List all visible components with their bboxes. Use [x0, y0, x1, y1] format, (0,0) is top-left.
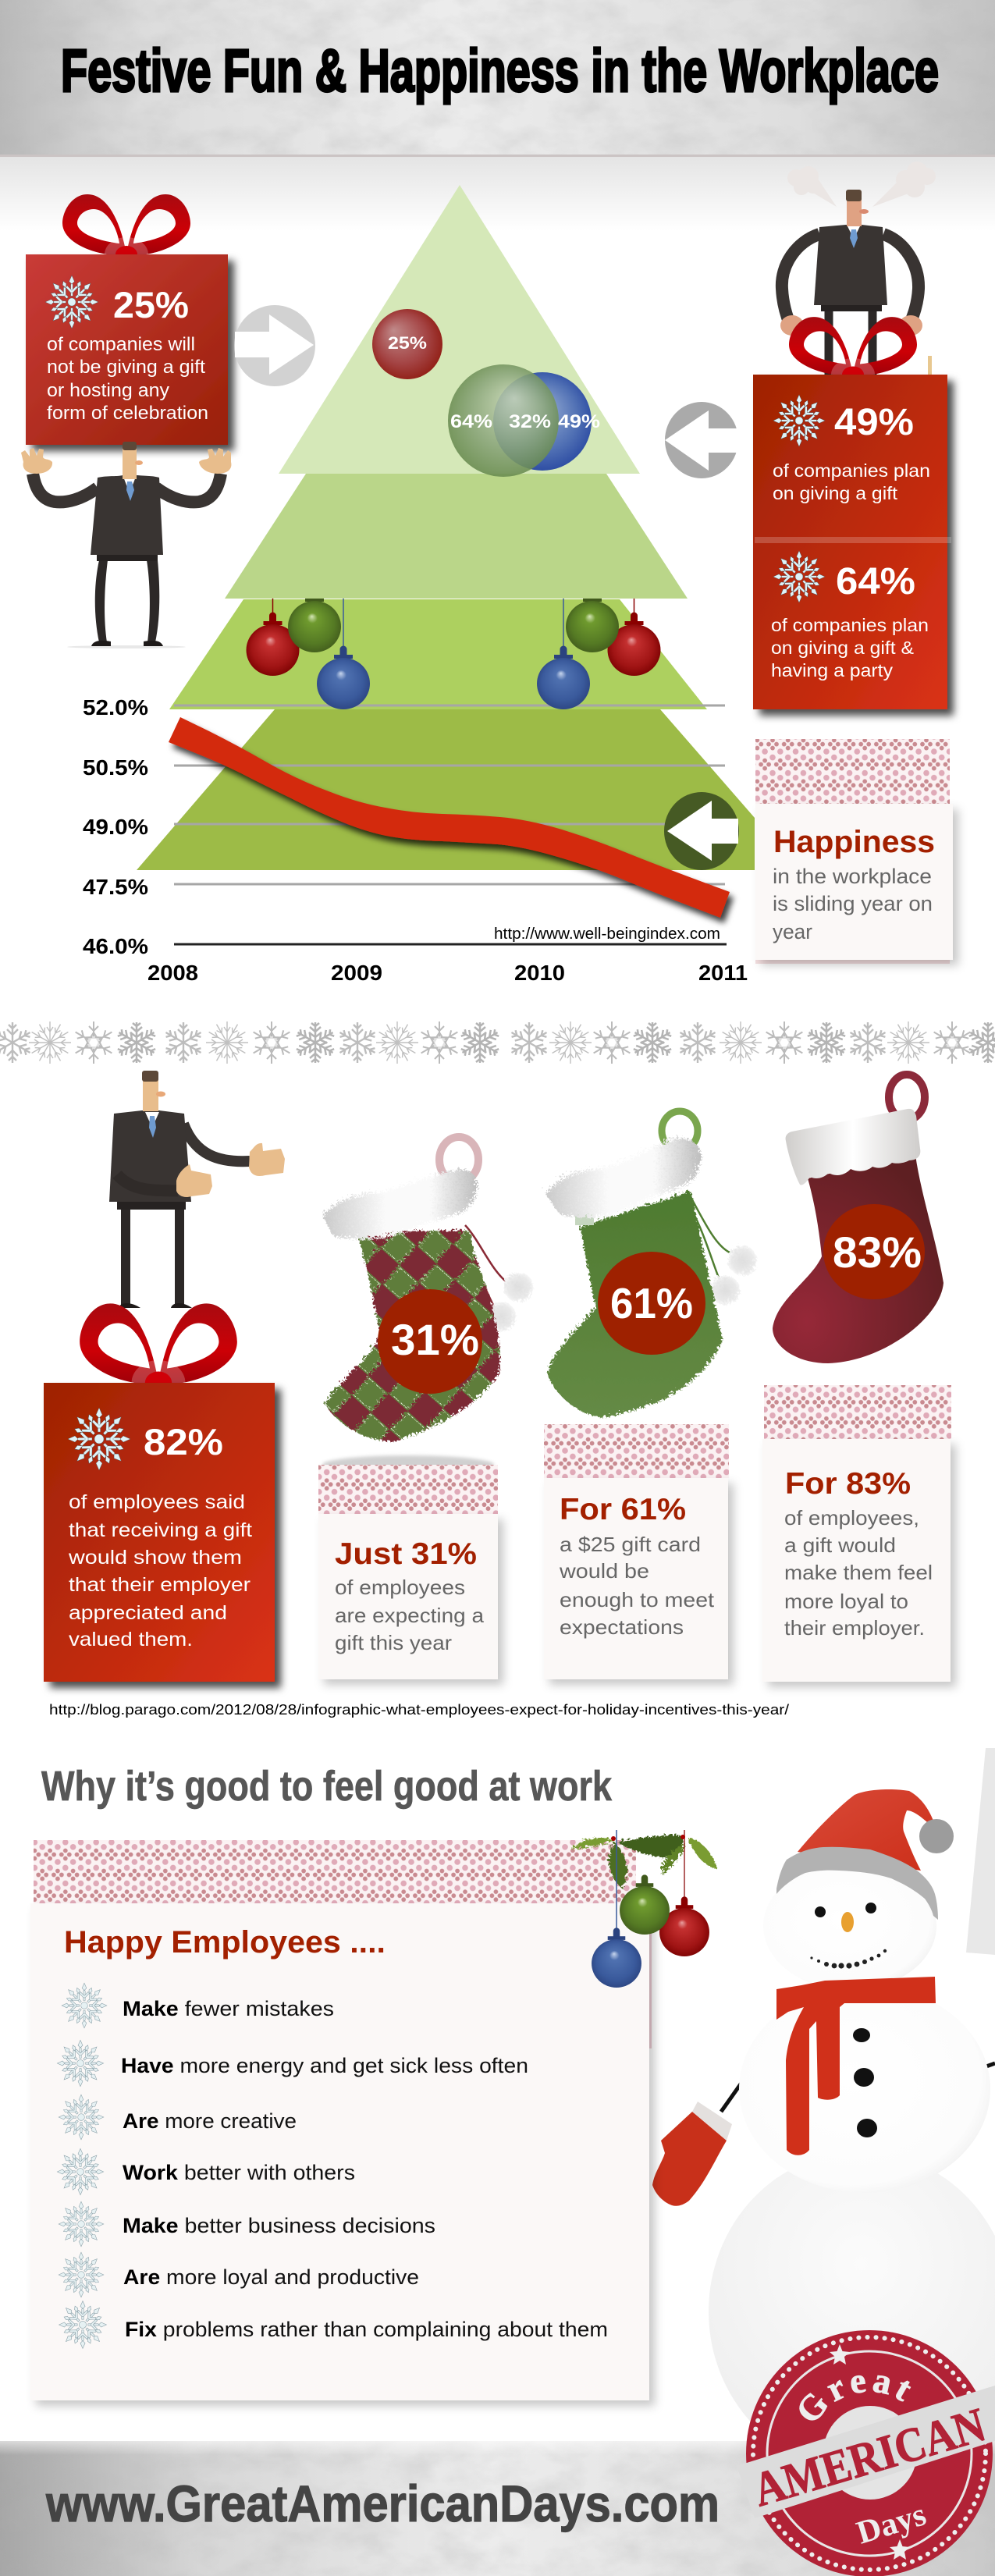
description: sliding: year — [773, 920, 812, 943]
panel: 82 percent gift box — [44, 1383, 275, 1682]
panel: for 83 percent card — [762, 1385, 951, 1682]
face — [810, 1903, 887, 1969]
description: appreciated: valued them. — [69, 1629, 193, 1650]
description: gift and party: of companies plan — [771, 615, 929, 635]
source url: parago blog: http://blog.parago.com/2012/08/28/infographic-what-employees-expect-for-holiday-incentives-this-year/ — [49, 1702, 789, 1718]
description: appreciated: would show them — [68, 1547, 242, 1569]
red ornament — [659, 1900, 709, 1956]
grey shape top right — [966, 1748, 995, 1955]
gift bow 1 — [62, 194, 190, 254]
website url: www.GreatAmericanDays.com — [45, 2475, 720, 2532]
stat: 82 percent: 82% — [144, 1421, 223, 1462]
list item: fix problems — [59, 2301, 608, 2348]
heading: for 61 percent: For 61% — [560, 1493, 686, 1526]
list item: work better: Work better with others — [123, 2161, 355, 2184]
hanging ornaments on tree — [247, 592, 660, 709]
description: appreciated: of employees said — [69, 1491, 245, 1513]
description: appreciated — [68, 1491, 252, 1650]
axis labels: 52.0% — [83, 695, 148, 720]
stamp: great american days — [746, 2330, 995, 2576]
background fade below header — [0, 157, 995, 231]
stamp word: great: Great — [799, 2375, 911, 2421]
description: no gift: or hosting any — [47, 380, 169, 401]
description: plan on gift: on giving a gift — [773, 483, 898, 503]
list item: better decisions — [59, 2201, 435, 2247]
bubble: 25 percent — [372, 309, 442, 379]
icon: snowflake — [773, 395, 825, 446]
stocking: burgundy 83 percent: 83% — [833, 1228, 922, 1277]
panel: 49 and 64 percent gift box — [753, 375, 951, 709]
description: appreciated: that their employer — [69, 1574, 251, 1596]
heading: happiness: Happiness — [773, 825, 935, 859]
list item: fix problems: Fix problems rather than complaining about them — [125, 2318, 608, 2341]
source url: http://www.well-beingindex.com — [494, 926, 720, 943]
list item: loyal and productive — [59, 2252, 419, 2297]
description: no gift: form of celebration — [47, 403, 208, 424]
blue ornament — [592, 1931, 641, 1988]
stamp banner — [737, 2386, 995, 2518]
steam clouds — [787, 162, 936, 207]
description: more loyal: make them feel — [784, 1561, 933, 1584]
panel: happy employees list — [30, 1840, 652, 2400]
panel: for 61 percent card — [544, 1424, 729, 1679]
list item: more creative — [59, 2095, 297, 2140]
green ornament — [620, 1878, 670, 1935]
holly and ornaments on list card — [569, 1830, 715, 1988]
axis labels: 49.0% — [83, 815, 148, 839]
panel: just 31 percent card — [318, 1455, 498, 1679]
arrow: left pointing grey — [665, 402, 738, 478]
description: more loyal: their employer. — [784, 1616, 925, 1640]
buttons — [853, 2028, 877, 2137]
description: no gift: not be giving a gift — [47, 357, 205, 378]
stat: 25 percent: 25% — [113, 284, 189, 325]
businessman gesturing — [109, 1071, 285, 1308]
description: expecting a gift: gift this year — [335, 1631, 452, 1654]
stocking: green 61 percent: 61% — [610, 1279, 693, 1327]
list item: more creative: Are more creative — [123, 2109, 297, 2133]
list item: better decisions: Make better business decisions — [123, 2214, 435, 2237]
description: expecting a gift: are expecting a — [335, 1604, 485, 1627]
icon: snowflake — [773, 551, 825, 602]
line chart: happiness 2008 to 2011 — [83, 695, 748, 985]
panel: happiness card — [755, 739, 953, 964]
arrow: right pointing grey — [234, 305, 315, 386]
overlapping bubbles: 64 32 49 percent — [448, 364, 600, 477]
description: gift and party: having a party — [771, 660, 894, 680]
gift bow 2 — [789, 317, 917, 375]
stocking: argyle 31 percent — [320, 1137, 531, 1440]
scarf — [776, 1977, 936, 2155]
lower christmas tree tiers — [137, 599, 755, 870]
list item: fewer mistakes — [62, 1983, 334, 2028]
description: gift and party: on giving a gift & — [771, 638, 914, 658]
description: plan on gift — [773, 460, 930, 503]
upper christmas tree tiers — [225, 185, 688, 599]
description: gift card: enough to meet — [560, 1588, 715, 1611]
stamp word: days: Days — [852, 2496, 930, 2552]
stat: 64 percent: 64% — [836, 561, 915, 602]
description: expecting a gift — [335, 1576, 485, 1654]
heading: just 31 percent: Just 31% — [335, 1537, 477, 1571]
overlapping bubbles: 64 32 49 percent: 32% — [509, 411, 551, 432]
snowflake divider strip — [0, 1022, 995, 1064]
stocking: argyle 31 percent: 31% — [391, 1315, 479, 1364]
axis labels: 2011 — [698, 961, 748, 985]
axis labels: 46.0% — [83, 934, 148, 958]
description: more loyal — [784, 1506, 933, 1640]
header band — [0, 0, 995, 157]
axis labels — [83, 695, 748, 985]
description: sliding: is sliding year on — [773, 892, 933, 915]
description: gift card: would be — [559, 1559, 649, 1583]
chart gridlines — [174, 705, 727, 944]
santa hat — [776, 1789, 954, 1920]
description: gift and party — [771, 615, 929, 680]
bubble: 25 percent: 25% — [388, 333, 427, 353]
description: more loyal: of employees, — [784, 1506, 919, 1530]
businessman with steam above gift box — [780, 162, 936, 375]
holly leaves — [569, 1833, 715, 1887]
section heading: why it is good: Why it’s good to feel good at work — [41, 1763, 613, 1810]
arrow: left pointing green — [664, 792, 739, 870]
description: gift card — [559, 1533, 715, 1639]
list item: more energy — [57, 2040, 528, 2087]
description: sliding: in the workplace — [773, 865, 932, 888]
description: plan on gift: of companies plan — [773, 460, 930, 481]
axis labels: 2009 — [331, 961, 382, 985]
overlapping bubbles: 64 32 49 percent: 64% — [450, 411, 492, 432]
list item: work better — [57, 2148, 355, 2195]
stocking: green 61 percent — [542, 1111, 755, 1416]
footer band — [0, 2433, 995, 2576]
description: more loyal: a gift would — [784, 1533, 896, 1557]
axis labels: 47.5% — [83, 875, 148, 899]
stat: 49 percent: 49% — [834, 402, 914, 443]
description: no gift — [47, 334, 208, 424]
description: gift card: a $25 gift card — [560, 1533, 701, 1556]
description: gift card: expectations — [560, 1615, 684, 1639]
axis labels: 2010 — [514, 961, 565, 985]
description: appreciated: appreciated and — [69, 1602, 227, 1624]
list item: fewer mistakes: Make fewer mistakes — [123, 1997, 334, 2020]
icon: snowflake — [45, 275, 98, 329]
stocking: burgundy 83 percent — [773, 1075, 943, 1363]
businessman holding gift box — [21, 442, 231, 648]
mitten — [652, 2102, 732, 2206]
description: appreciated: that receiving a gift — [69, 1519, 252, 1541]
list item: loyal and productive: Are more loyal and productive — [123, 2265, 419, 2289]
snowman — [652, 1789, 995, 2471]
heading: happy employees: Happy Employees .... — [64, 1925, 386, 1960]
description: sliding — [773, 865, 933, 943]
description: more loyal: more loyal to — [784, 1590, 908, 1613]
overlapping bubbles: 64 32 49 percent: 49% — [558, 411, 600, 432]
snowman lower body — [709, 2151, 995, 2471]
axis labels: 50.5% — [83, 755, 148, 780]
description: no gift: of companies will — [47, 334, 195, 355]
panel: 25 percent gift box — [26, 254, 228, 445]
icon: snowflake — [68, 1408, 130, 1470]
snowman arms — [721, 2063, 995, 2112]
trend ribbon — [169, 717, 730, 918]
gift bow 3 — [80, 1303, 237, 1383]
axis labels: 2008 — [147, 961, 198, 985]
list item: more energy: Have more energy and get sick less often — [121, 2054, 528, 2077]
heading: for 83 percent: For 83% — [785, 1467, 911, 1501]
description: expecting a gift: of employees — [335, 1576, 465, 1599]
